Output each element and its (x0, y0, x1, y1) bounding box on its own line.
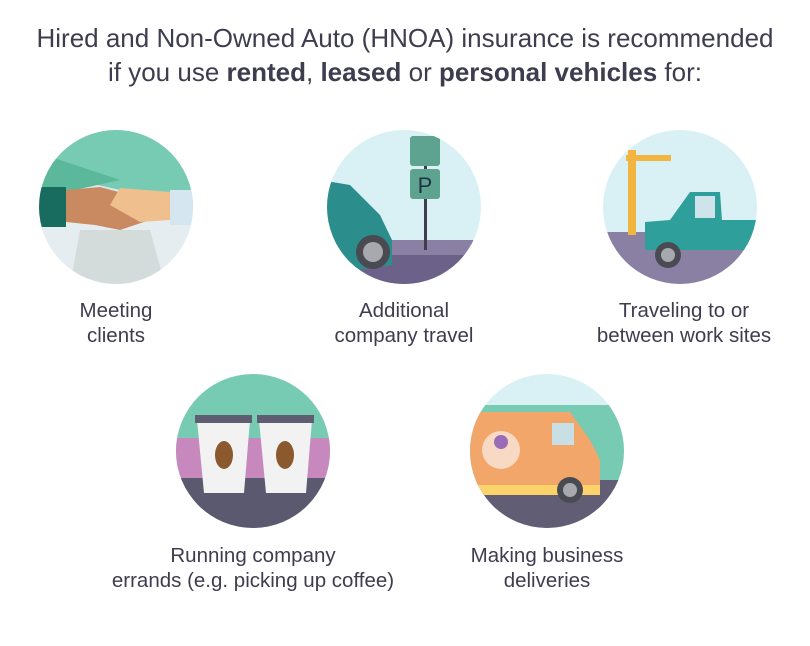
label: work sites: Traveling to or (619, 299, 749, 322)
label: meeting clients: clients (87, 324, 145, 347)
label: deliveries: Making business (471, 544, 623, 567)
label: work sites: between work sites (597, 324, 771, 347)
label: work sites (597, 299, 771, 347)
icon: pickup truck with crane (603, 130, 757, 284)
icon: handshake (39, 130, 193, 284)
label: deliveries (471, 544, 623, 592)
title (36, 23, 774, 87)
label: errands: Running company (170, 544, 336, 567)
title: Hired and Non-Owned Auto (HNOA) insurance is recommended (36, 23, 774, 53)
icon: car at airport parking: P (418, 173, 432, 198)
title: if you use rented, leased or personal vehicles for: (108, 57, 702, 87)
icon: coffee cups (176, 374, 330, 528)
label: deliveries: deliveries (504, 569, 590, 592)
icon: car at airport parking (327, 130, 481, 284)
label: errands (112, 544, 394, 592)
label: meeting clients (80, 299, 152, 347)
label: additional company travel: Additional (359, 299, 449, 322)
label: additional company travel: company travel (334, 324, 474, 347)
icon: delivery van (470, 374, 624, 528)
label: errands: errands (e.g. picking up coffee) (112, 569, 394, 592)
label: meeting clients: Meeting (80, 299, 152, 322)
label: additional company travel (334, 299, 474, 347)
